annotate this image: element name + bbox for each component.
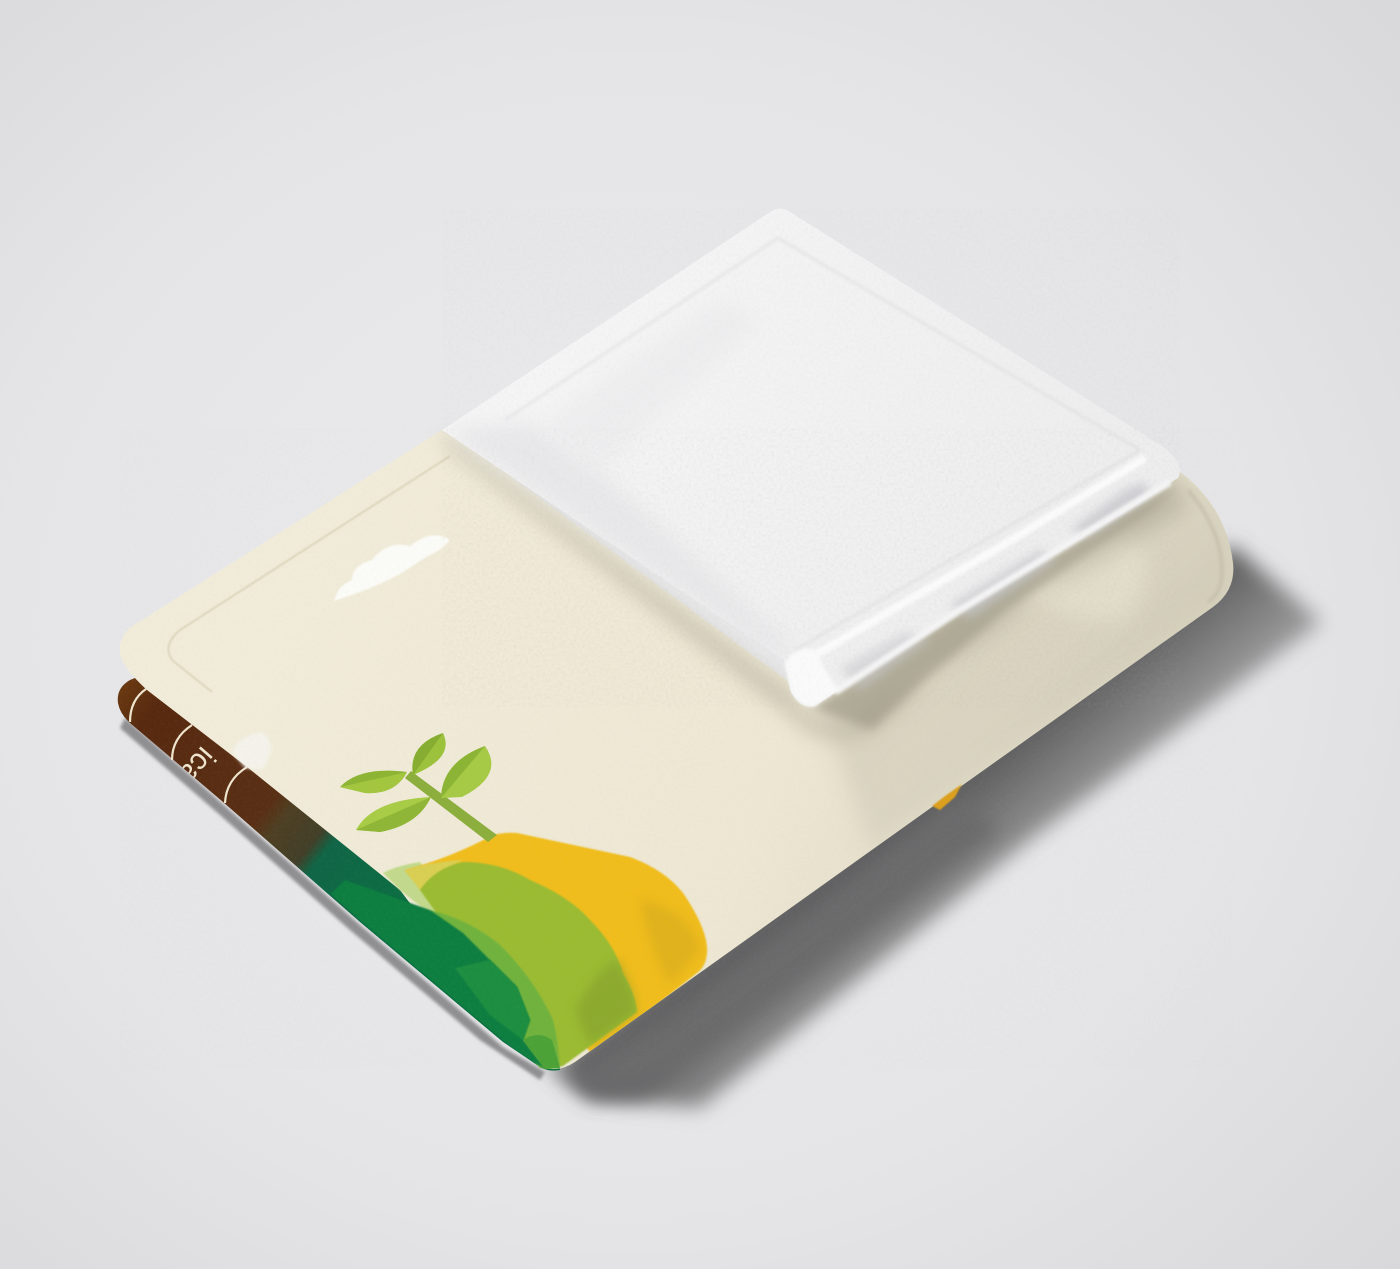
spine seam lines — [130, 689, 247, 803]
hill layers — [330, 833, 707, 1069]
flap hem stitch lines — [505, 238, 1140, 650]
white folded flap — [442, 208, 1180, 707]
flap lower rim highlight — [835, 482, 1170, 692]
yellow motif at fold edge — [932, 784, 962, 810]
dark green hill — [330, 880, 545, 1069]
ground shadow of blanket — [120, 545, 1322, 1108]
sprout plant — [340, 733, 497, 842]
roll edge shadow on flap, mottled — [840, 482, 1150, 690]
roll end seam — [1188, 490, 1222, 602]
fleece texture — [442, 208, 1180, 707]
cream front of blanket — [120, 428, 1233, 1069]
leaf — [441, 746, 491, 798]
pale yellow hill tip — [405, 860, 463, 890]
fabric texture over cream — [120, 428, 1233, 1069]
soft wrinkle on flap — [540, 300, 760, 470]
cloud top — [334, 535, 450, 601]
leaf — [356, 797, 431, 832]
pale green hill — [382, 862, 436, 912]
rolled right-hand fold — [826, 566, 1234, 841]
stem — [405, 771, 497, 842]
diagonal fold crease — [445, 422, 790, 662]
leaf — [340, 771, 407, 793]
spine: brown and green lower fold — [118, 672, 560, 1071]
light green hill — [430, 910, 560, 1069]
folded blanket — [118, 208, 1233, 1071]
flap front edge highlight — [815, 458, 1145, 655]
flap tip — [785, 649, 838, 706]
leaf — [412, 733, 446, 775]
spine lettering: ica — [171, 740, 222, 791]
shadow cast by flap — [445, 432, 1190, 738]
yellow shading — [642, 903, 698, 980]
lime hill — [420, 862, 637, 1069]
yellow hill — [405, 833, 707, 1052]
front-edge stitched hem — [168, 456, 450, 692]
cloud lower, cut by fold — [232, 732, 271, 770]
